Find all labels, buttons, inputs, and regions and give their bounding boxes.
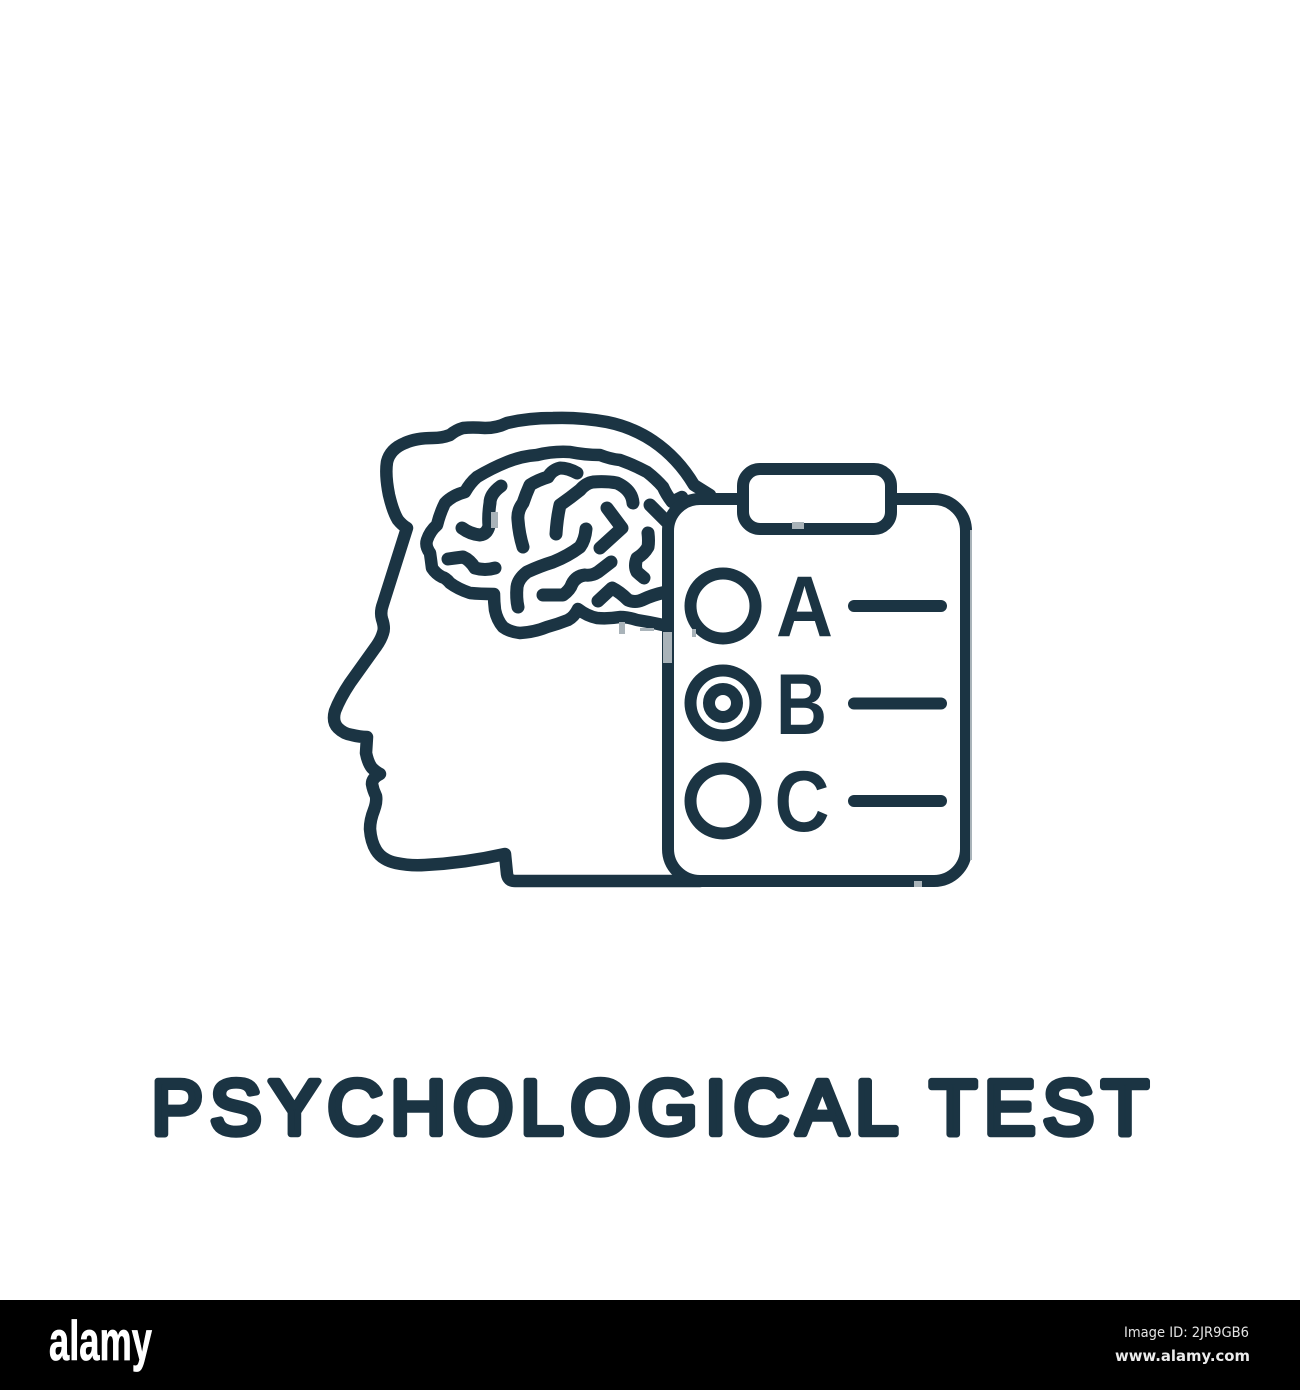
icon: clipboard clip <box>743 469 891 529</box>
icon: head profile outline <box>334 418 710 881</box>
title: PSYCHOLOGICAL TEST <box>152 1065 1148 1151</box>
icon: empty radio option A <box>690 574 756 638</box>
option letter B: B <box>776 657 827 753</box>
answer line B <box>854 698 941 710</box>
answer line A <box>854 600 941 612</box>
icon: clipboard board <box>668 499 966 881</box>
footer logo: alamy <box>49 1309 152 1372</box>
option letter A: A <box>776 559 833 655</box>
icon: empty radio option C <box>690 768 756 834</box>
icon: selected radio option B <box>690 670 756 736</box>
watermark fragments <box>491 512 972 887</box>
image id: Image ID: 2JR9GB6 <box>1124 1325 1249 1341</box>
option letter C: C <box>774 754 830 850</box>
footer band <box>0 1300 1300 1390</box>
answer line C <box>854 795 941 807</box>
icon: brain outline <box>426 452 682 633</box>
icon: brain folds <box>448 468 668 607</box>
website: www.alamy.com <box>1115 1347 1250 1365</box>
icon: head with brain and test clipboard <box>334 418 966 881</box>
